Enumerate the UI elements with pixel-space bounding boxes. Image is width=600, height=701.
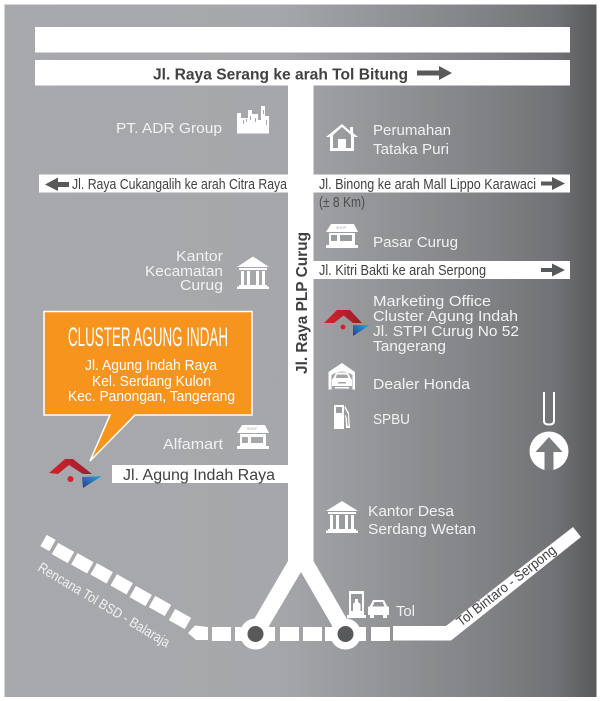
text: Kantor Desa Serdang Wetan: Kantor Desa	[368, 503, 455, 520]
callout: Cluster Agung Indah	[44, 312, 252, 461]
road: Tol Bintaro - Serpong	[393, 527, 581, 640]
road: Jl. Agung Indah Raya: Jl. Agung Indah Raya	[123, 467, 275, 484]
icon: government building Kecamatan	[237, 256, 269, 289]
road: Jl. Raya PLP Curug vertical	[288, 85, 314, 563]
text: Perumahan Tataka Puri: Perumahan	[373, 122, 451, 139]
callout: Cluster Agung Indah: Kel. Serdang Kulon	[92, 374, 211, 390]
icon: fuel pump	[334, 405, 350, 429]
icon: shop Pasar Curug: SHOP	[336, 226, 347, 230]
text: Pasar Curug: Pasar Curug	[373, 234, 458, 251]
icon: shop Alfamart: SHOP	[247, 427, 258, 431]
icon: shop Alfamart	[237, 425, 269, 449]
text: Alfamart: Alfamart	[163, 436, 224, 453]
road: Jl. Raya PLP Curug vertical: Jl. Raya PLP Curug	[294, 232, 311, 374]
text: Perumahan Tataka Puri: Tataka Puri	[373, 141, 449, 158]
icon: north compass	[530, 392, 568, 470]
text: Rencana Tol BSD - Balaraja: Rencana Tol BSD - Balaraja	[35, 559, 173, 650]
text: Kantor Kecamatan Curug: Curug	[180, 277, 223, 294]
text: marketing office address	[373, 293, 519, 355]
arrow: right to Tol Bitung	[417, 66, 452, 80]
text: distance: (± 8 Km)	[319, 195, 365, 211]
text: marketing office address: Cluster Agung Indah	[373, 308, 518, 325]
icon: logo Cluster Agung Indah	[49, 459, 102, 488]
icon: logo marketing office	[324, 310, 370, 336]
road: Tol Bintaro - Serpong: Tol Bintaro - Serpong	[453, 542, 559, 629]
road: Jl. Raya Serang: Jl. Raya Serang ke arah Tol Bitung	[153, 66, 408, 84]
callout: Cluster Agung Indah: Kec. Panongan, Tangerang	[68, 389, 235, 405]
junction: left roundabout	[240, 618, 271, 650]
junction: right roundabout	[330, 618, 361, 650]
text: Kantor Desa Serdang Wetan: Serdang Wetan	[368, 521, 476, 538]
text: Kantor Desa Serdang Wetan	[368, 503, 476, 538]
text: Kantor Kecamatan Curug: Kantor	[176, 248, 223, 265]
icon: car dealer garage	[328, 363, 355, 390]
text: marketing office address: Marketing Office	[373, 293, 491, 310]
arrow: right to Serpong	[541, 264, 565, 276]
text: marketing office address: Tangerang	[373, 338, 446, 355]
road: Jl. Raya Cukangalih	[39, 174, 288, 193]
road: planned toll dashed	[44, 540, 188, 624]
callout: Cluster Agung Indah: CLUSTER AGUNG INDAH	[68, 322, 228, 352]
road: top blank road	[35, 27, 570, 52]
road: Jl. Binong: Jl. Binong ke arah Mall Lippo Karawaci	[319, 176, 536, 193]
road: Jl. Raya Serang	[35, 60, 570, 86]
text: SPBU: SPBU	[373, 411, 410, 428]
text: Kantor Kecamatan Curug	[145, 248, 223, 294]
icon: house	[326, 124, 358, 151]
text: marketing office address: Jl. STPI Curug No 52	[373, 323, 519, 340]
road: Jl. Raya Cukangalih: Jl. Raya Cukangalih ke arah Citra Raya	[72, 176, 288, 193]
road: Jl. Kitri Bakti: Jl. Kitri Bakti ke arah Serpong	[319, 262, 486, 279]
arrow: left to Citra Raya	[45, 178, 69, 191]
road: fork branches	[249, 552, 352, 636]
icon: government building Kantor Desa	[326, 501, 358, 533]
text: Dealer Honda: Dealer Honda	[373, 376, 471, 393]
icon: shop Pasar Curug	[326, 224, 358, 248]
icon: buildings	[237, 106, 269, 134]
road: toll dashes and corner	[188, 626, 390, 641]
text: Tol: Tol	[396, 603, 415, 620]
callout: Cluster Agung Indah: Jl. Agung Indah Raya	[85, 358, 218, 374]
icon: toll booth and car	[347, 591, 389, 618]
text: Perumahan Tataka Puri	[373, 122, 451, 158]
text: Kantor Kecamatan Curug: Kecamatan	[145, 263, 223, 280]
arrow: right to Karawaci	[541, 177, 565, 190]
text: PT. ADR Group: PT. ADR Group	[116, 120, 222, 137]
